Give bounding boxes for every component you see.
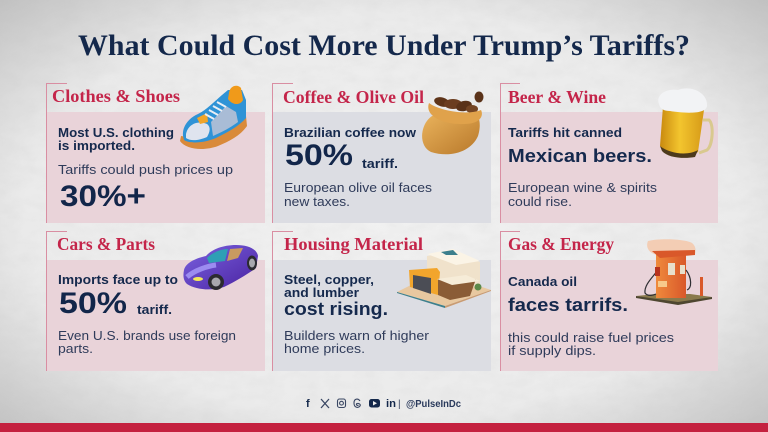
- heading: coffee and olive oil: Coffee & Olive Oil: [283, 87, 424, 107]
- title: What Could Cost More Under Trump’s Tariffs?: [78, 29, 690, 62]
- text: european wine: could rise.: [508, 194, 572, 209]
- text: tariff: tariff.: [137, 302, 172, 317]
- text: european wine: European wine & spirits: [508, 180, 658, 195]
- icon: threads: [354, 399, 360, 407]
- text: steel copper lumber: [284, 272, 374, 300]
- heading: beer and wine: Beer & Wine: [508, 87, 606, 107]
- text: clothing imported: is imported.: [58, 138, 135, 153]
- text: tariffs push prices: Tariffs could push prices up: [58, 162, 233, 177]
- stat: 30 percent plus: 30%+: [60, 180, 146, 213]
- panel: coffee and olive oil: [272, 84, 491, 223]
- social footer: [306, 398, 461, 410]
- icon: purple car: [183, 245, 258, 290]
- panel: clothes and shoes: [46, 84, 265, 223]
- bottom bar: [0, 423, 768, 432]
- icon: gas pump: [636, 239, 712, 305]
- text: builders warn: home prices.: [284, 341, 365, 356]
- icon: instagram: [338, 399, 346, 408]
- icon: house: [397, 249, 491, 308]
- divider: |: [398, 399, 401, 410]
- heading: clothes and shoes: Clothes & Shoes: [52, 86, 180, 106]
- text: faces tarrifs: faces tarrifs.: [508, 294, 628, 315]
- text: brazilian coffee: Brazilian coffee now: [284, 125, 417, 140]
- icon: shoe: [180, 86, 247, 149]
- text: canned beers: Tariffs hit canned: [508, 125, 622, 140]
- text: builders warn: [284, 328, 430, 356]
- text: fuel prices: this could raise fuel prices: [508, 330, 675, 345]
- text: cost rising: cost rising.: [284, 298, 388, 319]
- handle: @PulseInDc: [406, 399, 461, 410]
- icon: x: [321, 399, 329, 408]
- icon: youtube: [369, 399, 380, 408]
- heading: gas and energy: Gas & Energy: [508, 234, 614, 254]
- text: us brands: parts.: [58, 341, 93, 356]
- panel: gas and energy: [500, 232, 718, 371]
- text: us brands: Even U.S. brands use foreign: [58, 328, 236, 343]
- text: olive oil taxes: European olive oil faces: [284, 180, 433, 195]
- text: olive oil taxes: new taxes.: [284, 194, 350, 209]
- heading: cars and parts: Cars & Parts: [57, 234, 155, 254]
- text: fuel prices: [508, 330, 675, 358]
- stat: 50 percent: 50%: [59, 287, 127, 320]
- text: clothing imported: Most U.S. clothing: [58, 125, 174, 140]
- text: tariff: tariff.: [362, 156, 398, 171]
- panel: cars and parts: [46, 232, 265, 371]
- panel: beer and wine: [500, 84, 718, 223]
- text: fuel prices: if supply dips.: [508, 343, 596, 358]
- panel: housing material: [272, 232, 491, 371]
- icon: beer mug: [658, 88, 712, 158]
- text: steel copper lumber: Steel, copper,: [284, 272, 374, 287]
- text: mexican beers: Mexican beers.: [508, 145, 652, 166]
- stat: 50 percent: 50%: [285, 139, 353, 172]
- heading: housing material: Housing Material: [284, 234, 423, 254]
- text: steel copper lumber: and lumber: [284, 285, 359, 300]
- text: clothing imported: [58, 125, 174, 153]
- text: us brands: [58, 328, 236, 356]
- icon: coffee sack: [422, 92, 484, 154]
- text: canada oil: Canada oil: [508, 274, 577, 289]
- text: imports face: Imports face up to: [58, 272, 178, 287]
- icon: linkedin: in: [386, 398, 396, 410]
- icon: facebook: f: [306, 398, 310, 410]
- text: european wine: [508, 180, 658, 209]
- text: olive oil taxes: [284, 180, 433, 209]
- text: builders warn: Builders warn of higher: [284, 328, 430, 343]
